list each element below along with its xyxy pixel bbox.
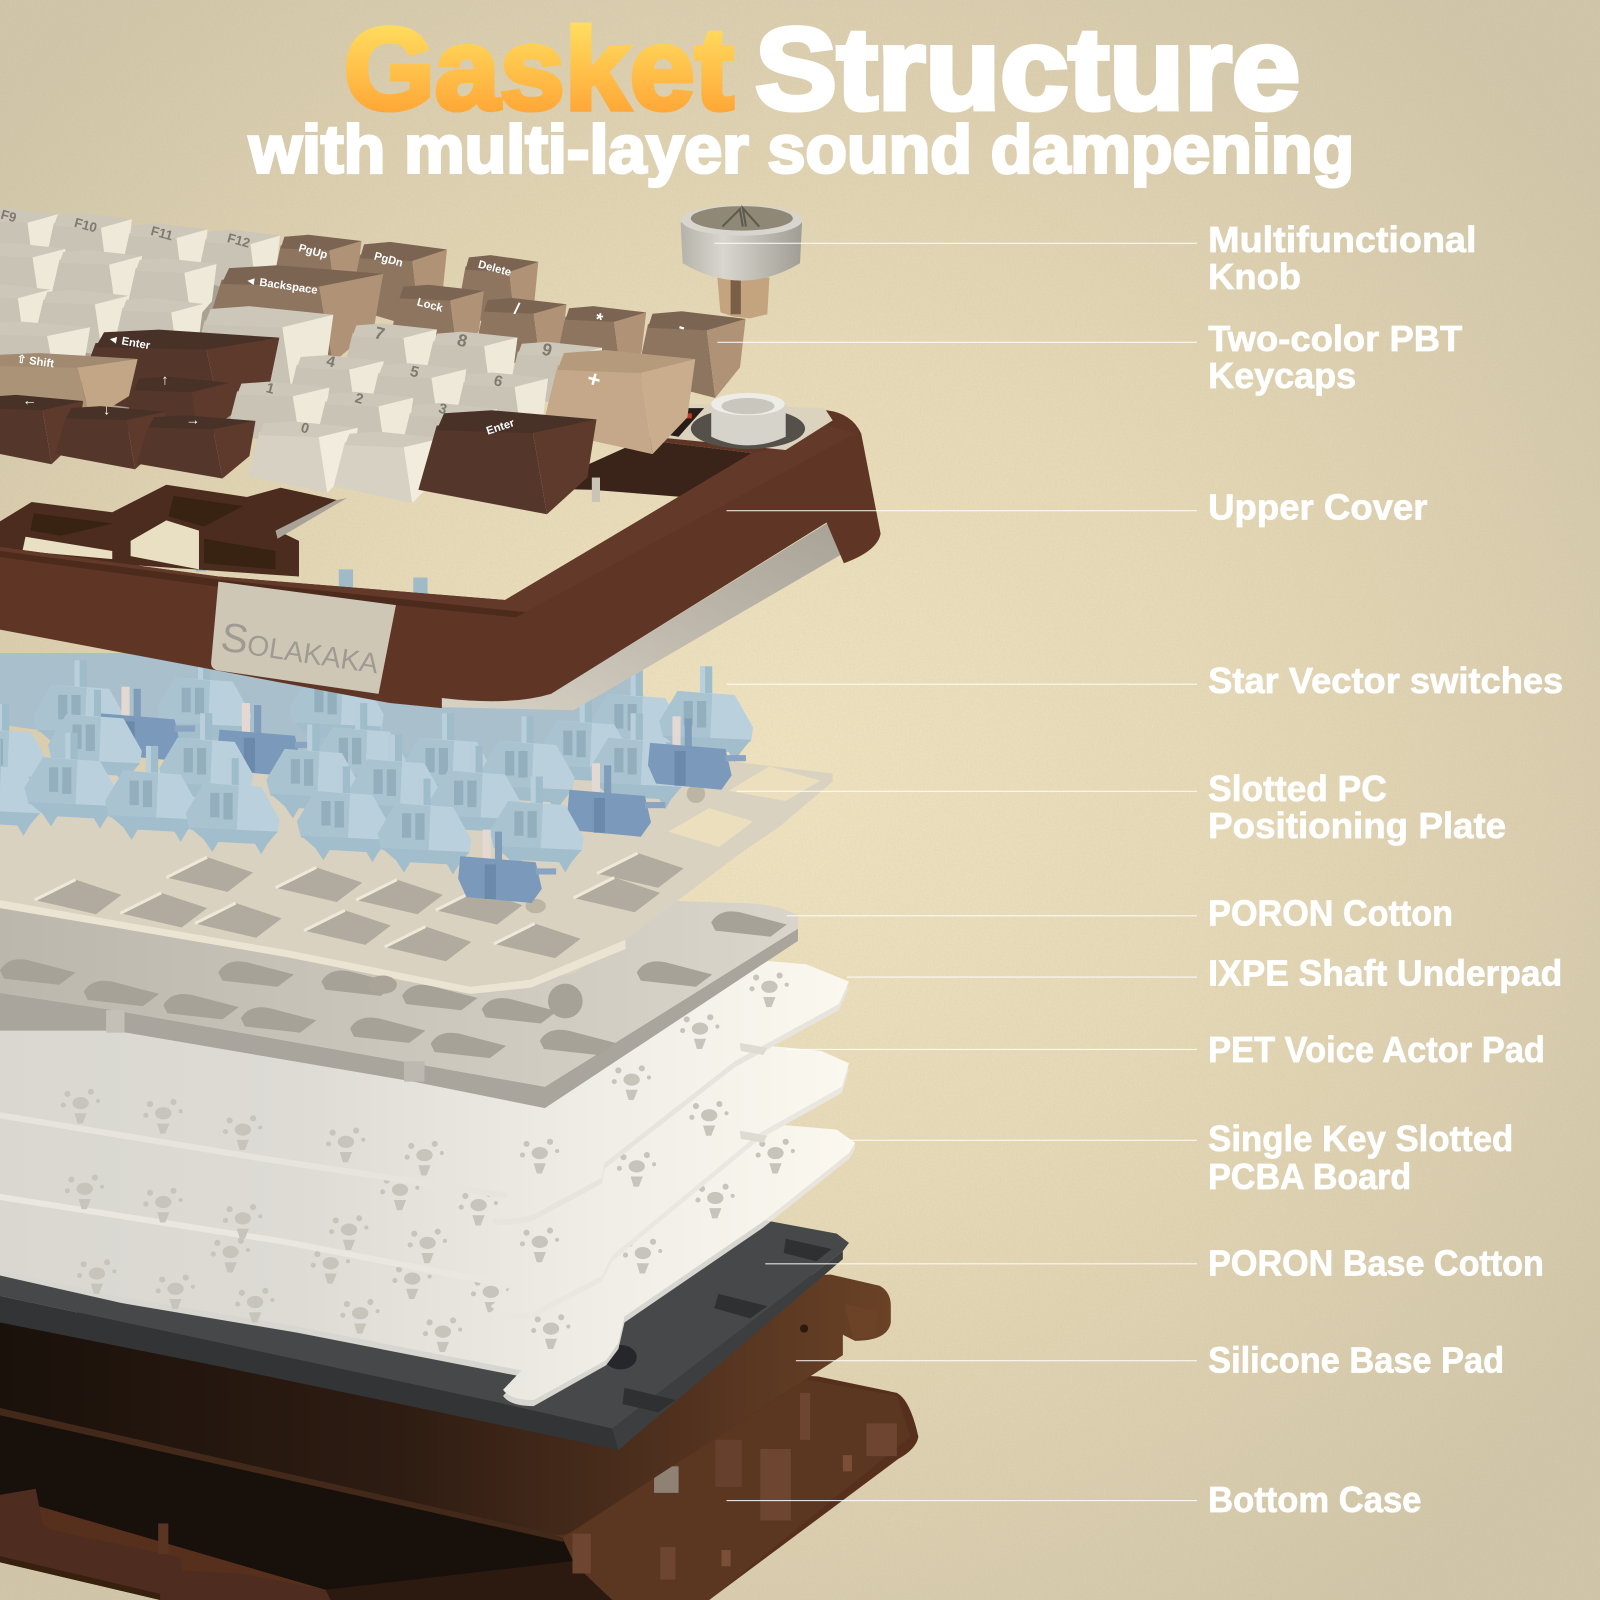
keycap legends: F10 — [73, 215, 99, 235]
keycap legends: ← — [22, 393, 37, 409]
layer: single key slotted PCBA board — [0, 1102, 855, 1406]
layer: upper cover — [0, 410, 881, 710]
layer: silicone base pad — [0, 1274, 891, 1542]
layer: star vector switches — [0, 653, 753, 903]
keycap legends: 6 — [492, 372, 504, 391]
keycap legends: 0 — [299, 420, 311, 438]
labels: Bottom Case — [1208, 1480, 1421, 1520]
layer: bottom case — [0, 1327, 918, 1600]
layer: IXPE shaft underpad — [0, 939, 849, 1225]
keycap legends: 9 — [540, 339, 554, 360]
title — [248, 4, 1354, 187]
keycap legends: PgUp — [297, 242, 329, 262]
keycap legends: 7 — [372, 322, 387, 344]
keycap legends: F12 — [226, 230, 252, 251]
keycap legends: 8 — [455, 329, 470, 351]
labels: Silicone Base Pad — [1208, 1340, 1504, 1380]
labels: Single Key Slotted — [1208, 1119, 1513, 1159]
keycap legends: 5 — [408, 363, 421, 382]
keycap legends — [0, 207, 688, 438]
keycap legends: 1 — [264, 380, 276, 398]
keycap legends: ◄ Enter — [107, 333, 152, 352]
keycap legends: ◄ Backspace — [244, 275, 318, 297]
title: Structure — [755, 4, 1300, 134]
labels: Knob — [1208, 257, 1301, 297]
layer: PET voice actor pad — [0, 1020, 849, 1320]
labels: Upper Cover — [1208, 487, 1428, 527]
labels: PCBA Board — [1208, 1157, 1411, 1197]
keycap legends: 3 — [437, 401, 449, 418]
keycap legends: / — [512, 300, 522, 318]
keyboard control plate and encoder — [643, 393, 833, 450]
layer: PORON base cotton — [0, 1219, 849, 1450]
labels: Star Vector switches — [1208, 661, 1563, 701]
keycap legends: → — [186, 412, 200, 428]
labels: Positioning Plate — [1208, 806, 1506, 846]
icon: multifunctional knob — [681, 205, 802, 318]
labels: Multifunctional — [1208, 220, 1477, 260]
nameplate: SOLAKAKA — [218, 613, 382, 682]
two-color PBT keycaps — [0, 208, 746, 514]
labels: Keycaps — [1208, 356, 1356, 396]
labels: Slotted PC — [1208, 769, 1387, 809]
labels: PET Voice Actor Pad — [1208, 1030, 1545, 1070]
keycap legends: 4 — [324, 353, 338, 371]
keycap legends: 2 — [353, 390, 365, 408]
labels: Two-color PBT — [1208, 319, 1462, 359]
keycap legends: Lock — [416, 296, 445, 315]
leader lines — [714, 243, 1197, 1501]
title: Gasket — [344, 4, 734, 134]
keycap legends: - — [677, 315, 688, 337]
keycap legends: ↑ — [161, 373, 168, 389]
keycap legends: ↓ — [103, 402, 110, 418]
keycap legends: Delete — [477, 259, 512, 279]
keycap legends: ⇧ Shift — [16, 353, 55, 370]
keycap legends: + — [584, 365, 604, 393]
title: with multi-layer sound dampening — [248, 112, 1354, 187]
nameplate — [211, 582, 396, 694]
labels — [1208, 220, 1563, 1520]
labels: IXPE Shaft Underpad — [1208, 954, 1562, 994]
keycap legends: Enter — [485, 417, 517, 438]
keycap legends: * — [593, 308, 606, 330]
keycap legends: PgDn — [373, 250, 404, 270]
labels: PORON Cotton — [1208, 894, 1453, 934]
layer: slotted PC positioning plate — [0, 756, 833, 994]
layer: PORON cotton — [0, 878, 798, 1108]
labels: PORON Base Cotton — [1208, 1244, 1544, 1284]
keycap legends: F11 — [149, 223, 174, 243]
